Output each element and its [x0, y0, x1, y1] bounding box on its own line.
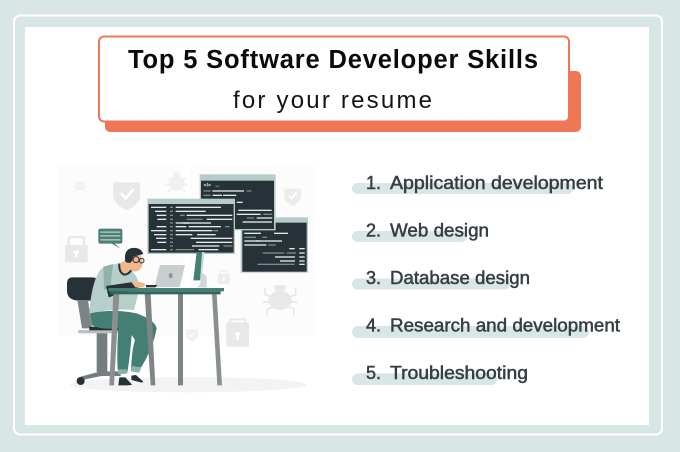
skill 5: 5. — [366, 363, 381, 383]
icon: centre padlock — [218, 271, 230, 284]
hair — [125, 248, 143, 263]
skill 1: 1. — [366, 173, 381, 193]
skill 1: Application development — [390, 173, 603, 193]
title banner — [99, 36, 581, 132]
desk — [108, 288, 224, 385]
skill 2 — [352, 220, 489, 242]
icon: large bug — [263, 286, 297, 317]
skill 4: 4. — [366, 316, 381, 336]
faint background panels — [58, 165, 315, 337]
laptop — [146, 265, 185, 287]
trousers — [90, 311, 157, 373]
skill 5: Troubleshooting — [390, 363, 528, 383]
icon: top bug — [165, 172, 188, 193]
icon: lower shield — [186, 329, 198, 341]
skill 5 — [352, 363, 528, 385]
speech bubble — [98, 229, 122, 249]
code tag glyph: </> — [204, 183, 211, 189]
ground shadow — [70, 377, 307, 392]
office chair — [67, 277, 123, 385]
subtitle: for your resume — [233, 87, 432, 114]
code window: right — [241, 217, 308, 273]
banner shadow — [105, 71, 581, 132]
icon: small bug — [73, 181, 87, 192]
icon: right shield — [284, 189, 301, 206]
skill 2: 2. — [366, 220, 381, 240]
icon: large shield — [113, 182, 140, 210]
skills list — [352, 173, 620, 385]
person — [89, 248, 157, 385]
banner box — [99, 36, 569, 122]
forearm and hand — [106, 282, 139, 297]
neck and collar — [119, 257, 131, 274]
code window: back — [200, 174, 276, 230]
desktop monitor stand — [193, 252, 207, 287]
code window: front — [147, 199, 235, 254]
title: Top 5 Software Developer Skills — [128, 46, 538, 74]
skill 3: Database design — [390, 268, 530, 288]
skill 4: Research and development — [390, 316, 620, 336]
icon: left padlock — [65, 237, 88, 262]
shirt — [89, 263, 140, 314]
shoes — [118, 377, 132, 385]
illustration: developer at desk — [58, 165, 315, 392]
icon: lower padlock — [226, 319, 249, 347]
glasses — [133, 257, 144, 263]
skill 3: 3. — [366, 268, 381, 288]
head — [127, 252, 143, 272]
skill 2: Web design — [390, 220, 489, 240]
